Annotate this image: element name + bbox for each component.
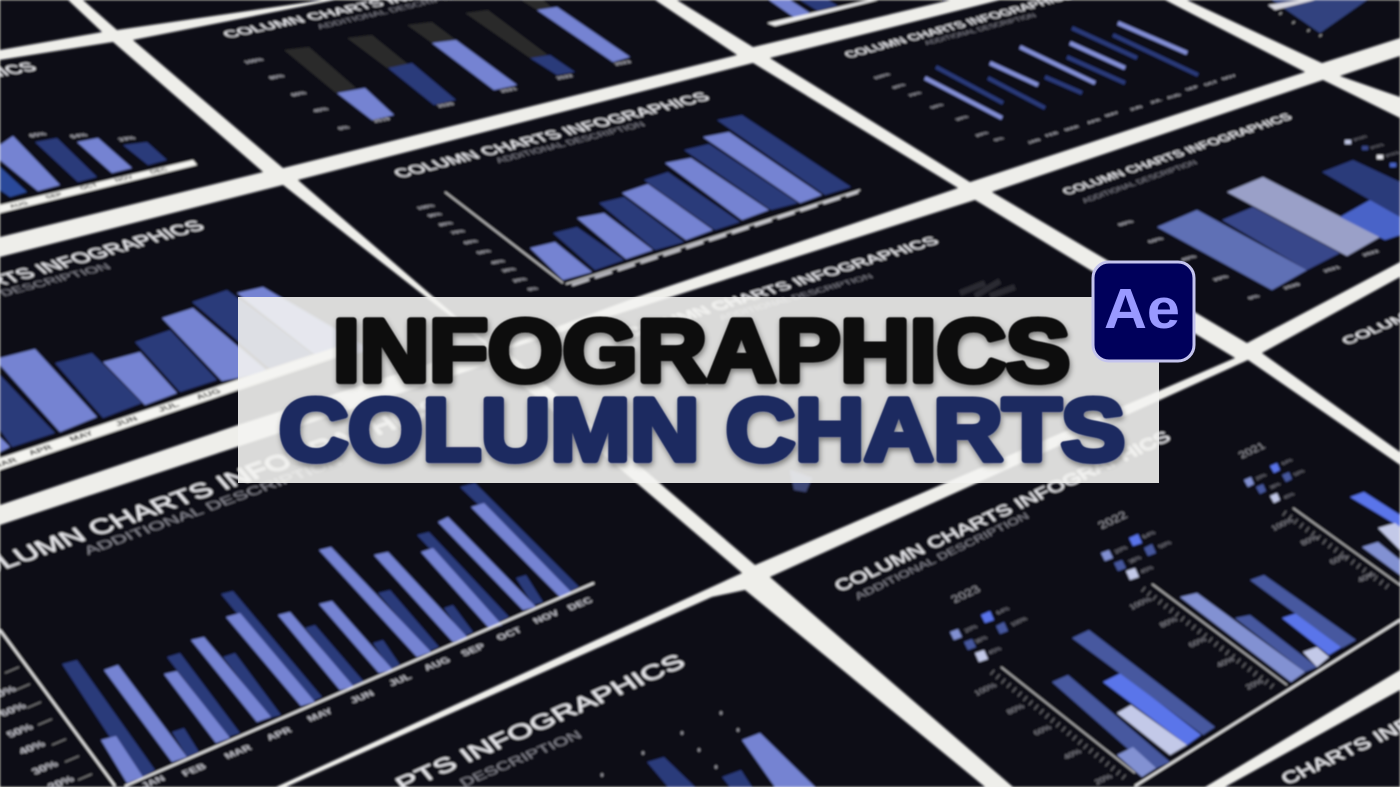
title: COLUMN CHARTS INFOGRAPHICS bbox=[622, 235, 943, 339]
month labels bbox=[139, 596, 596, 787]
panel: top tiny slide bbox=[677, 0, 950, 47]
year: 2022 bbox=[1095, 509, 1130, 531]
legend: 45% bbox=[1283, 492, 1297, 501]
month labels: SEP bbox=[459, 642, 488, 658]
month labels: FEB bbox=[180, 762, 209, 778]
axis labels: 2020 bbox=[1282, 282, 1303, 290]
legend: 2021 bbox=[1369, 143, 1386, 150]
columns bbox=[1052, 630, 1215, 777]
columns bbox=[0, 136, 167, 197]
month labels: MAY bbox=[67, 429, 97, 443]
month labels: DEC bbox=[565, 596, 596, 613]
axis bbox=[1001, 667, 1135, 773]
month labels: APR bbox=[264, 726, 295, 743]
icon: After Effects badge: Ae bbox=[1104, 277, 1180, 341]
axis labels: 60% bbox=[1328, 552, 1349, 566]
axis value labels: 0% bbox=[527, 287, 541, 292]
labels: 54% bbox=[69, 133, 90, 139]
axis labels: 40% bbox=[312, 107, 331, 113]
axis labels: 2019 bbox=[372, 117, 393, 124]
panel: center slide with blue columns bbox=[298, 63, 958, 350]
y axis ticks bbox=[5, 667, 92, 780]
axis labels: 40% bbox=[1356, 570, 1377, 584]
panel: left slide with white baseline bbox=[0, 42, 263, 237]
axis labels: 100% bbox=[1128, 595, 1153, 611]
axis value labels bbox=[416, 204, 541, 292]
labels bbox=[8, 132, 170, 209]
axis labels: 20% bbox=[1093, 772, 1114, 786]
month labels: AUG bbox=[422, 655, 453, 673]
title: COLUMN CHARTS INFOGRAPHICS bbox=[389, 90, 714, 180]
small column bbox=[790, 470, 812, 492]
panel: right slide with wide columns bbox=[992, 80, 1400, 343]
x axis bbox=[125, 583, 594, 786]
chart 2022 bbox=[1095, 509, 1356, 691]
month labels: AUG bbox=[194, 387, 223, 402]
axis labels bbox=[1128, 595, 1265, 691]
axis labels: 80% bbox=[268, 74, 287, 80]
axis labels: 60% bbox=[290, 91, 309, 97]
axis labels: 2021 bbox=[499, 87, 520, 94]
white baseline bbox=[0, 160, 197, 213]
month labels: JUL bbox=[386, 672, 415, 688]
axis labels: JUL bbox=[1149, 98, 1165, 105]
labels: NOV bbox=[114, 175, 135, 183]
panel: right slide edge bbox=[1262, 274, 1400, 452]
axis labels: 0% bbox=[993, 137, 1006, 142]
panel: center slide partly behind banner bbox=[505, 200, 1235, 565]
subtitle: ADDITIONAL DESCRIPTION bbox=[716, 273, 875, 321]
axis labels: 50% bbox=[929, 103, 946, 110]
axis value labels: 70% bbox=[450, 229, 468, 235]
axis labels: JUN bbox=[1128, 105, 1144, 112]
legend: 20% bbox=[1255, 473, 1269, 482]
month labels: APR bbox=[27, 444, 55, 457]
stacked columns bbox=[284, 0, 630, 120]
legend bbox=[1345, 135, 1400, 167]
axis labels: 100% bbox=[873, 73, 892, 80]
legend: 2020 bbox=[1352, 135, 1369, 142]
panel: left large slide with wide columns bbox=[0, 185, 487, 505]
month labels: NOV bbox=[531, 609, 562, 626]
labels: DEC bbox=[149, 167, 170, 175]
axis labels: 0% bbox=[337, 125, 352, 131]
axis labels: 80% bbox=[1005, 702, 1026, 716]
legend: 45% bbox=[1139, 564, 1156, 575]
axis value labels: 80% bbox=[438, 221, 456, 227]
percent labels: 50% bbox=[5, 723, 36, 740]
chart 2021 bbox=[1236, 441, 1400, 590]
axis labels: 80% bbox=[1117, 220, 1136, 227]
axis value labels: 100% bbox=[416, 204, 437, 211]
panel: top strip slide bbox=[83, 0, 323, 30]
axis value labels: 50% bbox=[476, 249, 494, 255]
axis labels: 100% bbox=[973, 681, 998, 697]
legend: 100% bbox=[1009, 616, 1029, 628]
title: COLUMN CHARTS INFOGRAPHICS bbox=[830, 427, 1174, 595]
subtitle: ADDITIONAL DESCRIPTION bbox=[493, 121, 648, 165]
axis labels: MAR bbox=[1063, 125, 1081, 132]
title: COLUMN CHARTS: COLUMN CHARTS bbox=[279, 380, 1125, 479]
axis labels bbox=[1270, 516, 1377, 584]
title banner background bbox=[238, 297, 1159, 483]
axis labels: 20% bbox=[974, 131, 991, 138]
panel: bottom right corner slide bbox=[1225, 690, 1400, 787]
axis labels: 80% bbox=[891, 83, 908, 90]
panel: top right thin column slide bbox=[770, 0, 1305, 182]
axis labels: AUG bbox=[1166, 93, 1183, 100]
percent labels: 30% bbox=[30, 760, 61, 777]
axis labels: 40% bbox=[1062, 747, 1083, 761]
axis labels bbox=[873, 73, 1238, 145]
axis labels: 30% bbox=[954, 115, 971, 122]
white baseline bbox=[0, 346, 345, 470]
axis labels: 0% bbox=[1247, 294, 1262, 300]
month labels: MAY bbox=[305, 707, 335, 724]
axis labels: 2023 bbox=[613, 60, 634, 67]
axis bbox=[1152, 584, 1287, 685]
percent labels bbox=[0, 685, 77, 787]
axis labels: 60% bbox=[1187, 635, 1208, 649]
columns bbox=[0, 287, 370, 452]
panel: top right slide with stacked columns bbox=[1187, 0, 1400, 63]
axis labels bbox=[973, 681, 1114, 786]
axis labels: APR bbox=[1086, 118, 1103, 125]
month labels: JUN bbox=[113, 415, 140, 428]
subtitle: ADDITIONAL DESCRIPTION bbox=[853, 511, 1032, 602]
grid dots bbox=[601, 713, 739, 775]
labels: 65% bbox=[28, 132, 49, 138]
legend bbox=[1101, 529, 1174, 580]
month labels: OCT bbox=[494, 625, 525, 643]
axis labels: SEP bbox=[1184, 85, 1201, 92]
axis value labels: 90% bbox=[427, 212, 445, 218]
subtitle: ADDITIONAL DESCRIPTION bbox=[922, 12, 1039, 46]
legend: 64% bbox=[1281, 458, 1295, 467]
legend: 20% bbox=[963, 623, 980, 634]
shared thin baseline bbox=[1135, 620, 1400, 786]
month labels bbox=[0, 387, 223, 471]
axis labels: 2020 bbox=[436, 102, 457, 109]
axis labels: 2022 bbox=[555, 74, 576, 81]
legend: 20% bbox=[1113, 544, 1130, 555]
legend: 64% bbox=[1141, 529, 1158, 540]
legend: 36% bbox=[1127, 554, 1144, 565]
icon: After Effects badge bbox=[1093, 262, 1194, 361]
axis labels: MAY bbox=[1104, 111, 1121, 118]
y axis bbox=[0, 630, 115, 786]
panel: small right slide bbox=[1340, 56, 1400, 97]
chart 2023 bbox=[948, 583, 1215, 786]
axis labels: 60% bbox=[1032, 723, 1053, 737]
month labels: JUL bbox=[156, 401, 182, 414]
axis labels: 80% bbox=[1158, 615, 1179, 629]
labels: OCT bbox=[79, 183, 100, 191]
faint columns bbox=[960, 281, 1015, 296]
axis labels: JAN bbox=[1026, 138, 1042, 145]
axis labels bbox=[243, 57, 634, 131]
panel: bottom-left slide with paired columns bbox=[0, 362, 742, 787]
year: 2021 bbox=[1236, 441, 1268, 461]
legend: 50% bbox=[1293, 469, 1307, 478]
subtitle: ADDITIONAL DESCRIPTION bbox=[1079, 159, 1199, 204]
percent labels: 40% bbox=[17, 740, 48, 757]
axis labels: 2021 bbox=[1322, 265, 1343, 273]
axis labels: 80% bbox=[1299, 533, 1320, 547]
columns bbox=[1350, 492, 1400, 575]
panel: chart with grey and blue stacked columns bbox=[133, 0, 737, 168]
legend: 64% bbox=[995, 605, 1012, 616]
labels: SEP bbox=[44, 192, 64, 200]
legend: 50% bbox=[1157, 539, 1174, 550]
axis value labels: 60% bbox=[463, 239, 481, 245]
axis labels: 60% bbox=[1147, 237, 1166, 244]
legend: 45% bbox=[987, 645, 1004, 656]
labels: 33% bbox=[117, 136, 138, 142]
month labels: MAR bbox=[222, 743, 255, 761]
axis labels: 20% bbox=[1244, 677, 1265, 691]
wide columns bbox=[1157, 160, 1400, 290]
month labels: JUN bbox=[348, 689, 377, 705]
subtitle: ADDITIONAL DESCRIPTION bbox=[80, 454, 345, 557]
panel: top-left corner slide bbox=[0, 0, 102, 50]
axis labels: 100% bbox=[243, 57, 266, 65]
axis value labels: 30% bbox=[501, 267, 519, 273]
axis value labels: 40% bbox=[490, 259, 508, 265]
labels: AUG bbox=[8, 201, 31, 209]
axis value labels: 20% bbox=[512, 277, 530, 283]
legend: 36% bbox=[973, 634, 990, 645]
title: INFOGRAPHICS: INFOGRAPHICS bbox=[333, 301, 1070, 400]
axis labels: 40% bbox=[1180, 255, 1199, 262]
axis labels: FEB bbox=[1044, 131, 1060, 138]
axis ticks bbox=[992, 672, 1125, 778]
columns bbox=[1180, 575, 1356, 682]
paired columns bbox=[62, 483, 579, 783]
legend bbox=[950, 605, 1029, 662]
columns bbox=[530, 115, 851, 280]
axis labels bbox=[1117, 220, 1382, 300]
title: COLUMN CHARTS INFOGRAPHICS bbox=[1059, 112, 1295, 197]
year: 2023 bbox=[948, 583, 983, 605]
axis labels: 2022 bbox=[1361, 249, 1382, 257]
legend bbox=[1244, 458, 1307, 503]
axis labels: NOV bbox=[1221, 74, 1238, 81]
axis ticks bbox=[1143, 589, 1277, 690]
axis bbox=[1293, 508, 1400, 585]
panel: bottom right slide with three charts bbox=[770, 360, 1400, 787]
axes bbox=[445, 190, 860, 285]
axis labels: 20% bbox=[1212, 275, 1231, 282]
axis ticks bbox=[1284, 513, 1392, 590]
axis labels: 70% bbox=[907, 91, 924, 98]
axis labels: 100% bbox=[1270, 516, 1295, 532]
panel: bottom center slide bbox=[286, 590, 985, 787]
axis labels: 40% bbox=[1215, 655, 1236, 669]
axis labels: OCT bbox=[1203, 80, 1220, 87]
legend: 36% bbox=[1269, 482, 1283, 491]
columns bbox=[647, 733, 815, 787]
thin columns bbox=[925, 23, 1198, 118]
